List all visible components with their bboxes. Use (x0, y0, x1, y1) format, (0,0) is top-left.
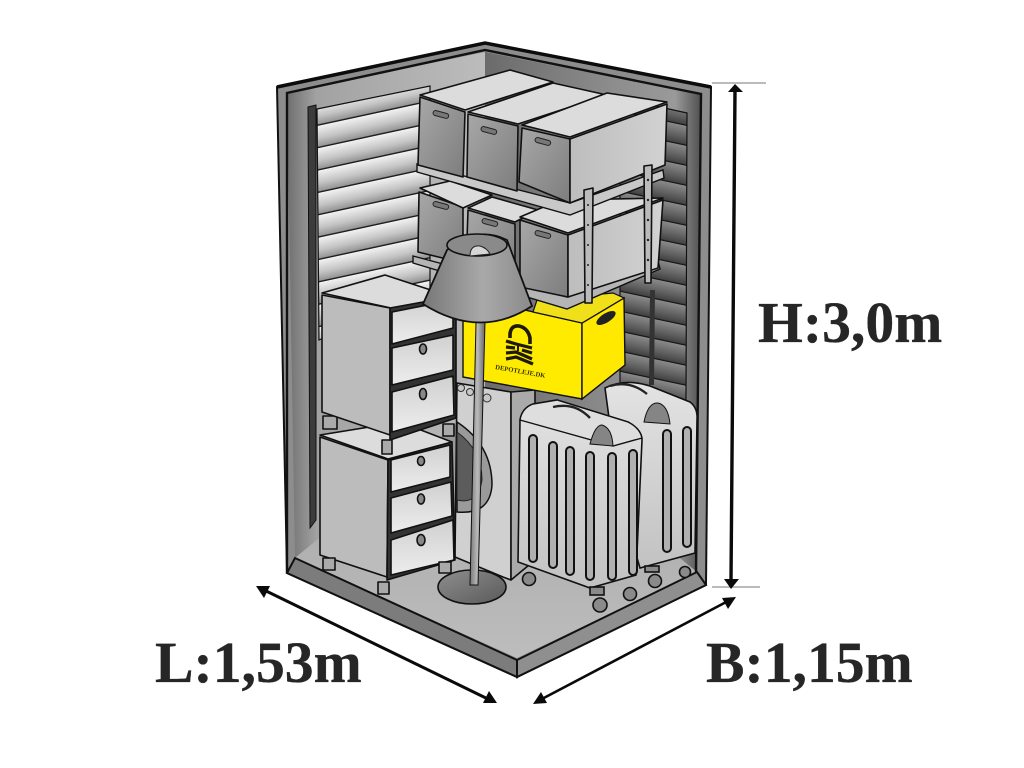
box 1 (418, 70, 553, 177)
height label: H:3,0m (758, 292, 942, 355)
handle (610, 384, 647, 394)
washer drum (457, 422, 492, 512)
shade opening (447, 234, 507, 256)
drawer unit: lower (320, 422, 455, 594)
height dimension (712, 83, 766, 589)
lamp shade (423, 234, 532, 323)
upper shelf (417, 164, 664, 215)
box 2 (467, 83, 607, 191)
logo text: DEPOTLEJE.DK (495, 364, 547, 380)
floor (295, 400, 697, 658)
right wall (485, 52, 701, 572)
floor front edge: left (287, 558, 517, 677)
box 4 (418, 181, 492, 263)
corner cap (590, 425, 613, 446)
ribs (663, 427, 691, 552)
shelf upright: front (584, 188, 593, 303)
drawers (391, 445, 454, 575)
logo (506, 326, 533, 364)
lamp pole (470, 322, 485, 585)
wheels (645, 566, 690, 588)
washer dials (458, 384, 491, 402)
knobs (420, 344, 426, 400)
upright holes (587, 179, 649, 286)
box handles (432, 110, 551, 146)
box 3 (519, 93, 667, 203)
floor lamp (423, 234, 532, 604)
suitcase: front (518, 400, 642, 612)
washing machine (455, 383, 535, 580)
lamp base (438, 570, 506, 604)
knobs (417, 456, 425, 546)
drawer unit: upper (322, 275, 456, 454)
box 5 (466, 197, 538, 280)
roller door: left (317, 86, 430, 340)
wheels (522, 572, 636, 612)
upper boxes (418, 70, 667, 203)
frame inner lines (287, 50, 701, 573)
width dimension (533, 597, 736, 704)
floor front edge: right (517, 572, 706, 677)
storage unit illustration (277, 43, 711, 677)
suitcase: rear (605, 382, 697, 588)
lower boxes (418, 181, 663, 297)
corner cap (644, 403, 670, 424)
left wall (287, 52, 485, 558)
box 6 (520, 198, 663, 297)
ribs (529, 435, 637, 580)
unit frame (277, 43, 711, 677)
box handles (432, 201, 551, 239)
door rail: left (308, 105, 316, 528)
shelf upright: rear (644, 165, 652, 283)
box hand hole (594, 308, 618, 328)
lower shelf (413, 256, 660, 309)
frame top lines (277, 43, 711, 87)
handle (553, 406, 590, 418)
yellow box (463, 293, 625, 399)
length label: L:1,53m (155, 632, 362, 695)
feet (323, 416, 454, 454)
length dimension (256, 586, 497, 703)
width label: B:1,15m (706, 632, 913, 695)
bulb (470, 246, 490, 256)
drawers (392, 300, 454, 432)
door rail: right (649, 290, 655, 385)
roller door: right (620, 98, 687, 400)
feet (323, 558, 451, 594)
